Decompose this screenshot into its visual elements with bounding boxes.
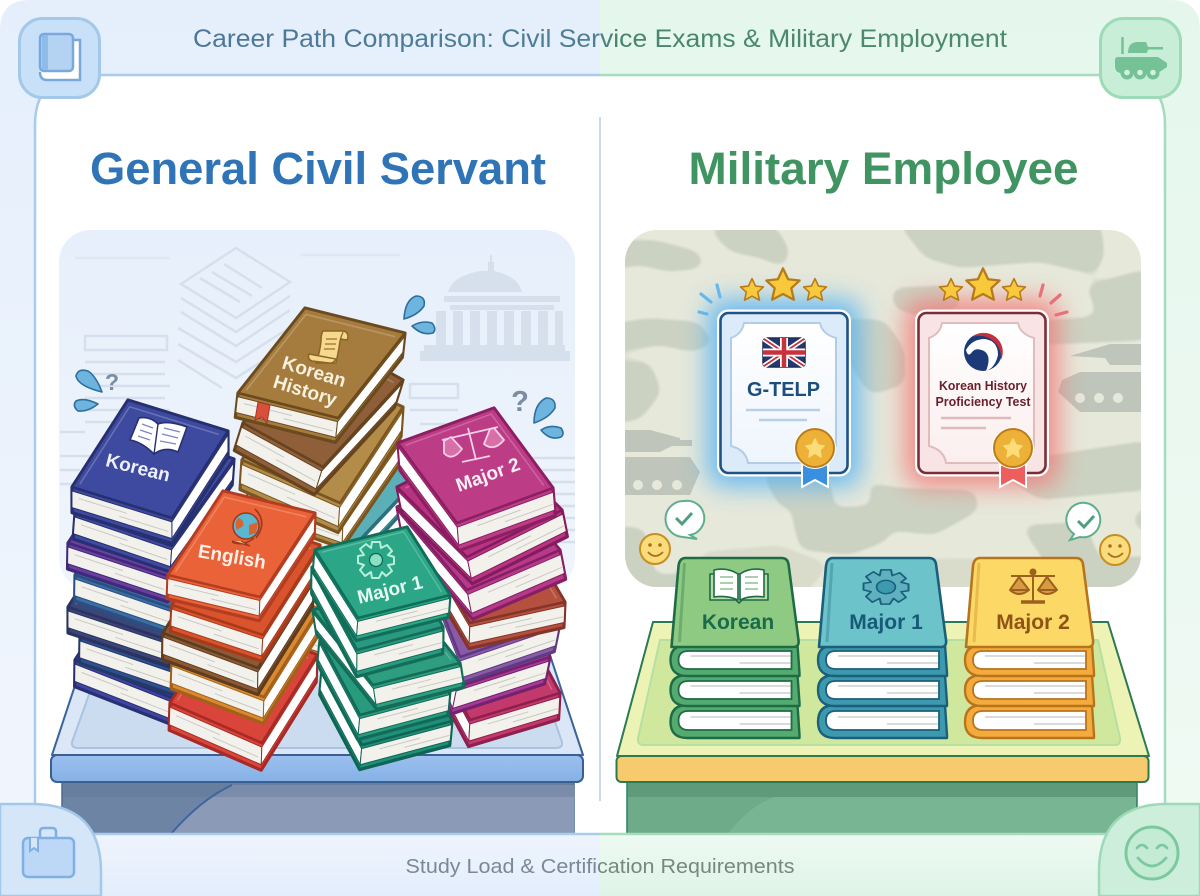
main white panel xyxy=(35,75,1165,835)
table: military xyxy=(616,622,1149,835)
stack: Major 2 book (military) xyxy=(965,558,1094,738)
icon: open book xyxy=(710,569,768,603)
text: Korean History: Korean xyxy=(279,353,348,392)
text: certificate name xyxy=(936,379,1031,409)
stars xyxy=(741,268,826,300)
heading: General Civil Servant: General Civil Servant xyxy=(90,143,546,194)
icon: open book xyxy=(130,418,187,454)
faint capitol building xyxy=(420,255,570,361)
icon: UK flag xyxy=(763,338,805,367)
icon: scales xyxy=(442,427,504,462)
text: certificate name: Korean History xyxy=(939,379,1027,393)
text: Korean: Korean xyxy=(702,611,774,634)
stack: Korean books xyxy=(54,400,247,725)
icon: sweat drops and question mark left: ? xyxy=(105,369,119,395)
text: G-TELP: G-TELP xyxy=(747,379,820,401)
icon: sweat drops and question mark left xyxy=(74,369,119,411)
icon: sweat drops and question mark right xyxy=(511,386,563,438)
panel: camouflage background xyxy=(625,230,1141,587)
icon: scales xyxy=(1010,570,1057,602)
footer bar xyxy=(0,834,1200,896)
certificate: Korean History Proficiency Test xyxy=(906,268,1067,487)
text: Korean History: History xyxy=(270,372,340,411)
divider xyxy=(599,117,601,801)
icon: scroll xyxy=(308,331,348,363)
text: Major 1: Major 1 xyxy=(355,572,425,609)
certificate: G-TELP xyxy=(699,268,860,487)
tank silhouette left xyxy=(625,430,700,495)
panel: civil servant background xyxy=(59,230,575,590)
icon: smiley badge xyxy=(1099,804,1200,896)
table: civil servant xyxy=(51,625,583,835)
icon: taegeuk xyxy=(964,333,1003,371)
heading: Military Employee: Military Employee xyxy=(688,143,1078,194)
stars xyxy=(940,268,1025,300)
icon: tank badge xyxy=(1100,18,1180,98)
stack: Major 1 books xyxy=(299,527,477,770)
text: English: English xyxy=(196,541,268,574)
icon: smiley right with check bubble xyxy=(1066,503,1130,565)
text: certificate name: Proficiency Test xyxy=(936,395,1031,409)
text: Korean History xyxy=(270,353,348,411)
glow xyxy=(906,300,1058,486)
icon: sweat drops and question mark right: ? xyxy=(511,386,529,418)
icon: sweat drops top xyxy=(404,296,435,334)
icon: gear xyxy=(358,542,394,578)
icon: gear xyxy=(864,570,908,604)
text: Major 1: Major 1 xyxy=(849,611,923,634)
stack: English books xyxy=(149,491,333,770)
footer text: Study Load & Certification Requirements xyxy=(406,856,794,878)
sparkle lines xyxy=(699,285,720,314)
faint stacks of paper xyxy=(60,248,575,542)
medal xyxy=(992,427,1034,487)
icon: book badge xyxy=(20,18,100,98)
text: Major 2: Major 2 xyxy=(453,454,523,497)
sparkle lines xyxy=(1040,285,1067,315)
stack: Major 1 book (military) xyxy=(818,558,947,738)
stack: Korean book (military) xyxy=(670,558,800,738)
stack: Major 2 books xyxy=(383,408,582,746)
text: Korean: Korean xyxy=(104,450,172,487)
text: Major 2: Major 2 xyxy=(996,611,1070,634)
icon: smiley left with check bubble xyxy=(640,501,704,564)
icon: bookmark ribbon xyxy=(255,402,270,423)
medal xyxy=(794,427,836,487)
title: Career Path Comparison: Civil Service Exams & Military Employment xyxy=(193,25,1007,53)
tank silhouette right xyxy=(1058,344,1141,412)
glow xyxy=(708,300,860,486)
stack: Korean History books xyxy=(222,308,441,666)
icon: globe xyxy=(232,509,262,546)
icon: briefcase badge xyxy=(0,804,101,896)
